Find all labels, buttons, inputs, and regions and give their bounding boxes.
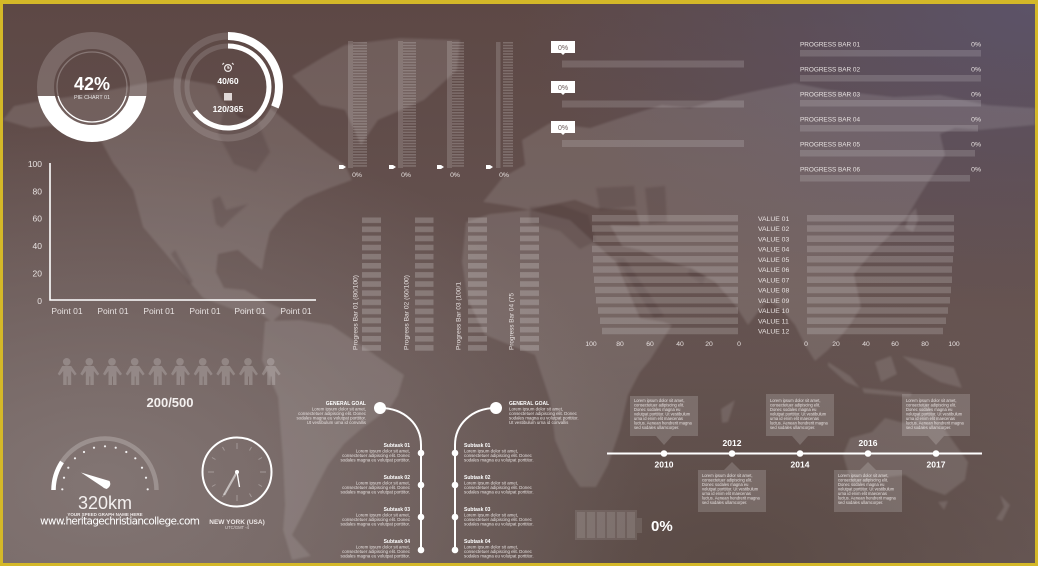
subtask 01: consectetuer adipiscing elit. Donec: [342, 453, 411, 458]
axis labels: 80: [616, 341, 624, 348]
gauge track: [54, 439, 156, 490]
gauge value arc: [54, 462, 62, 490]
timeline years: 2010: [655, 460, 674, 470]
rotated labels: Progress Bar 03 (100/1: [456, 282, 462, 350]
clock face: [202, 438, 272, 506]
subtask 03: Lorem ipsum dolor sit amet,: [356, 512, 410, 518]
subtask 02: [340, 475, 411, 494]
callout 2010: Lorem ipsum dolor sit amet,: [634, 398, 685, 403]
timeline line: [607, 452, 982, 454]
subtask 04: consectetuer adipiscing elit. Donec: [464, 549, 533, 554]
map: north america: [3, 78, 352, 322]
callout 2016: luctus. Aenean hendrerit magna: [838, 496, 897, 500]
y axis labels: 20: [33, 268, 42, 278]
path nodes: [374, 402, 424, 553]
rotated labels: Progress Bar 02 (60/100): [404, 275, 410, 350]
labelled progress bars: [800, 42, 981, 182]
ring value one: 40/60: [217, 76, 239, 86]
value labels: VALUE 02: [758, 226, 789, 233]
callout 2010: luctus. Aenean hendrerit magna: [634, 420, 693, 426]
bar names: PROGRESS BAR 01: [800, 42, 860, 48]
subtask 02: Subtask 02: [384, 475, 410, 481]
bar values: [352, 172, 509, 179]
value labels: VALUE 07: [758, 278, 789, 284]
gauge dots: [61, 445, 149, 490]
pie chart value arc: [38, 96, 146, 142]
bar names: PROGRESS BAR 05: [800, 142, 860, 148]
callout 2016: [834, 462, 902, 512]
bar names: [800, 42, 860, 174]
callout 2012: luctus. Aenean hendrerit magna: [702, 496, 761, 500]
subtask 01: consectetuer adipiscing elit. Donec: [464, 453, 533, 458]
callout 2014: urna id enim elit maecenas: [770, 416, 819, 421]
bar values: 0%: [971, 66, 981, 74]
map: indonesia and islands: [828, 356, 962, 397]
axis labels: 100: [585, 341, 597, 348]
subtask 03: consectetuer adipiscing elit. Donec: [342, 517, 411, 522]
subtask 01: Lorem ipsum dolor sit amet,: [356, 448, 410, 454]
callout 2010: [630, 396, 698, 445]
callout 2017: volutpat porttitor. Ut vestibulum: [906, 412, 963, 416]
timeline years: [655, 438, 946, 470]
callout 2017: sed sodales ullamcorper.: [906, 425, 951, 430]
icon: alarm clock: [222, 63, 234, 71]
callout 2017: Donec sodales magna eu: [906, 407, 952, 412]
y axis labels: [28, 159, 42, 306]
subtask 01: Subtask 01: [464, 443, 491, 449]
ring tracks: [177, 36, 279, 138]
callout 2010: consectetuer adipiscing elit.: [634, 402, 684, 408]
x axis labels: Point 01: [51, 306, 83, 316]
callout 2012: consectetuer adipiscing elit.: [702, 478, 752, 482]
callout 2014: [766, 394, 834, 445]
axis labels: 40: [862, 341, 870, 348]
goal text: [509, 401, 579, 425]
subtask 02: sodales magna eu volutpat porttitor.: [340, 490, 410, 494]
rotated labels: [352, 275, 516, 350]
subtask 04: consectetuer adipiscing elit. Donec: [342, 549, 411, 554]
y axis labels: 40: [33, 241, 42, 251]
map: small islands: [721, 208, 1010, 521]
callout 2016: Lorem ipsum dolor sit amet,: [838, 473, 889, 478]
line chart axes: [28, 159, 316, 316]
timeline years: 2016: [859, 438, 878, 448]
bar values: [971, 42, 981, 174]
goal text: GENERAL GOAL: [509, 401, 549, 407]
callout 2016: sed sodales ullamcorper.: [838, 500, 883, 505]
subtask 03: [340, 507, 411, 526]
y axis labels: 100: [28, 159, 42, 169]
segmented vertical bars: [352, 217, 539, 351]
left goal path: [296, 401, 424, 558]
callout 2017: Lorem ipsum dolor sit amet,: [906, 398, 957, 403]
callout 2016: consectetuer adipiscing elit.: [838, 478, 888, 482]
axis labels: 60: [646, 341, 654, 348]
icon: calendar: [224, 93, 232, 100]
x axis labels: Point 01: [143, 306, 175, 316]
bar values: 0%: [971, 166, 981, 174]
path line: [380, 408, 421, 550]
subtask 01: Lorem ipsum dolor sit amet,: [464, 448, 518, 454]
clock city: NEW YORK (USA): [209, 519, 265, 526]
rotated labels: Progress Bar 04 (75: [508, 293, 516, 350]
goal text: GENERAL GOAL: [326, 401, 366, 407]
callout 2010: urna id enim elit maecenas: [634, 416, 683, 421]
bar markers: [339, 165, 493, 169]
subtask 04: sodales magna eu volutpat porttitor.: [340, 554, 410, 558]
subtask 04: [464, 539, 534, 558]
y axis labels: 60: [33, 214, 42, 224]
subtask 03: Subtask 03: [384, 507, 410, 513]
callout 2017: urna id enim elit maecenas: [906, 416, 955, 421]
map: greenland: [292, 38, 460, 145]
value labels: VALUE 06: [758, 267, 789, 274]
callout 2014: sed sodales ullamcorper.: [770, 425, 815, 430]
battery cells: [577, 512, 635, 538]
x axis labels: Point 01: [189, 306, 221, 316]
y axis labels: 80: [33, 186, 42, 196]
battery value: 0%: [651, 518, 673, 535]
tooltip values: [558, 45, 568, 132]
bars: [800, 50, 981, 182]
axis labels: 100: [948, 341, 960, 348]
subtask 04: sodales magna eu volutpat porttitor.: [464, 554, 534, 558]
callout 2012: urna id enim elit maecenas: [702, 491, 751, 496]
value labels: VALUE 03: [758, 236, 789, 244]
goal text: [296, 401, 367, 425]
timeline years: 2012: [723, 438, 742, 448]
pie chart 01: [46, 40, 138, 134]
path line: [455, 408, 496, 550]
goal text: Lorem ipsum dolor sit amet,: [509, 406, 563, 412]
battery: [575, 510, 673, 540]
subtask 01: sodales magna eu volutpat porttitor.: [340, 458, 410, 462]
clock timezone: UTC/GMT -4: [225, 525, 250, 530]
axis labels: 20: [705, 341, 713, 348]
callout 2017: luctus. Aenean hendrerit magna: [906, 420, 965, 426]
segments: [362, 217, 539, 351]
subtask 03: Subtask 03: [464, 507, 491, 513]
ring value arcs: [195, 36, 279, 128]
bar values: 0%: [450, 172, 460, 179]
callout 2014: Donec sodales magna eu: [770, 407, 816, 412]
subtask 04: [340, 539, 411, 558]
callout 2016: Donec sodales magna eu: [838, 482, 884, 487]
subtask 02: Lorem ipsum dolor sit amet,: [356, 480, 410, 486]
map: inland seas: [171, 110, 706, 318]
bar tracks: [348, 41, 500, 168]
timeline years: 2017: [927, 460, 946, 470]
value labels: VALUE 10: [758, 308, 789, 315]
subtask 01: [464, 443, 534, 462]
y axis labels: 0: [37, 296, 42, 306]
tooltip boxes: [551, 41, 575, 135]
callout 2012: volutpat porttitor. Ut vestibulum: [702, 486, 759, 492]
subtask 02: sodales magna eu volutpat porttitor.: [464, 490, 534, 494]
map: africa: [462, 210, 672, 487]
double ring chart: [177, 36, 279, 138]
callout 2012: [698, 462, 766, 512]
goal text: Ut vestibulum urna id convallis: [509, 420, 569, 425]
value labels: VALUE 05: [758, 257, 789, 264]
bar values: 0%: [352, 172, 362, 179]
x axis labels: Point 01: [280, 306, 312, 316]
axis labels: 0: [804, 341, 808, 348]
callout 2017: [902, 394, 970, 445]
right bars: [807, 215, 954, 334]
vertical striped bars: [339, 41, 513, 179]
bar values: 0%: [971, 92, 981, 98]
left bars: [592, 215, 738, 334]
callout 2012: sed sodales ullamcorper.: [702, 500, 747, 505]
goal text: Lorem ipsum dolor sit amet,: [312, 406, 366, 412]
map: eurasia: [483, 83, 1035, 361]
subtask 02: Lorem ipsum dolor sit amet,: [464, 480, 518, 486]
bar stripes: [353, 41, 513, 168]
bar values: 0%: [971, 42, 981, 48]
value labels: VALUE 11: [758, 318, 789, 326]
bar values: 0%: [499, 172, 509, 179]
subtask 02: consectetuer adipiscing elit. Donec: [342, 485, 411, 490]
callout 2010: Donec sodales magna eu: [634, 407, 680, 412]
tooltip values: 0%: [558, 125, 568, 132]
speed gauge: [54, 439, 156, 517]
bar values: 0%: [401, 172, 411, 179]
axis labels: 80: [921, 341, 929, 348]
pie chart label: PIE CHART 01: [74, 95, 110, 101]
map: south america: [262, 320, 404, 560]
callout 2014: Lorem ipsum dolor sit amet,: [770, 398, 821, 403]
people count: 200/500: [146, 395, 194, 410]
subtask 04: Subtask 04: [464, 539, 491, 545]
callout 2016: urna id enim elit maecenas: [838, 491, 887, 496]
callout 2012: Lorem ipsum dolor sit amet,: [702, 473, 753, 478]
axis labels: 40: [676, 341, 684, 348]
value labels: VALUE 04: [758, 247, 789, 254]
subtask 03: sodales magna eu volutpat porttitor.: [340, 522, 410, 526]
timeline: [607, 394, 982, 512]
ring value two: 120/365: [213, 104, 244, 114]
value labels: [758, 216, 789, 336]
bar values: 0%: [971, 116, 981, 124]
pie chart value: 42%: [74, 74, 110, 94]
goal text: consectetuer adipiscing elit. Donec: [509, 411, 578, 416]
bars: [562, 60, 744, 147]
bar names: PROGRESS BAR 03: [800, 92, 860, 98]
timeline nodes: [661, 450, 939, 457]
value labels: VALUE 01: [758, 216, 789, 223]
goal text: sodales magna eu volutpat porttitor.: [296, 416, 366, 420]
x axis labels: Point 01: [234, 306, 266, 316]
clock ticks: [208, 443, 266, 501]
gauge needle: [81, 472, 110, 489]
bar values: 0%: [971, 142, 981, 148]
x axis labels: [51, 306, 312, 316]
callout 2010: sed sodales ullamcorper.: [634, 425, 679, 430]
goal text: Ut vestibulum urna id convallis: [307, 420, 367, 425]
path nodes: [452, 402, 502, 553]
subtask 03: consectetuer adipiscing elit. Donec: [464, 517, 533, 522]
axis labels: 60: [891, 341, 899, 348]
bar names: PROGRESS BAR 04: [800, 116, 860, 124]
battery body: [575, 510, 642, 540]
value labels: VALUE 08: [758, 288, 789, 295]
axis labels: [585, 341, 960, 348]
clock: [202, 438, 272, 530]
tooltip values: 0%: [558, 85, 568, 92]
bar names: PROGRESS BAR 06: [800, 166, 860, 174]
callout 2012: Donec sodales magna eu: [702, 482, 748, 487]
gauge value: 320km: [78, 493, 132, 513]
callout 2017: consectetuer adipiscing elit.: [906, 402, 956, 408]
callout 2014: luctus. Aenean hendrerit magna: [770, 420, 829, 426]
subtask 02: Subtask 02: [464, 475, 491, 481]
subtask 03: sodales magna eu volutpat porttitor.: [464, 522, 534, 526]
axis labels: 0: [737, 341, 741, 348]
butterfly bar chart: [585, 215, 960, 348]
x axis labels: Point 01: [97, 306, 129, 316]
subtask 03: Lorem ipsum dolor sit amet,: [464, 512, 518, 518]
tooltip progress bars: [551, 41, 744, 147]
goal text: consectetuer adipiscing elit. Donec: [298, 411, 367, 416]
callout 2014: consectetuer adipiscing elit.: [770, 402, 820, 408]
watermark: www.heritagechristiancollege.com: [40, 516, 200, 528]
subtask 04: Lorem ipsum dolor sit amet,: [464, 544, 518, 550]
right goal path: [452, 401, 579, 558]
pie chart background ring: [37, 32, 147, 96]
map: australia: [843, 400, 968, 495]
rotated labels: Progress Bar 01 (80/100): [352, 275, 360, 350]
value labels: VALUE 12: [758, 329, 789, 336]
callout 2014: volutpat porttitor. Ut vestibulum: [770, 412, 827, 416]
callout 2010: volutpat porttitor. Ut vestibulum: [634, 412, 691, 416]
subtask 01: Subtask 01: [384, 443, 410, 449]
subtask 02: [464, 475, 534, 494]
gauge label: YOUR SPEED GRAPH NAME HERE: [67, 512, 143, 517]
subtask 02: consectetuer adipiscing elit. Donec: [464, 485, 533, 490]
subtask 03: [464, 507, 534, 526]
subtask 01: [340, 443, 411, 462]
clock hands: [224, 472, 237, 495]
tooltip values: 0%: [558, 45, 568, 52]
people pictogram: [58, 358, 281, 385]
callout 2016: volutpat porttitor. Ut vestibulum: [838, 486, 895, 492]
goal text: sodales magna eu volutpat porttitor.: [509, 416, 579, 420]
bar names: PROGRESS BAR 02: [800, 66, 860, 74]
timeline years: 2014: [791, 460, 810, 470]
axis labels: 20: [832, 341, 840, 348]
subtask 04: Subtask 04: [384, 539, 410, 545]
subtask 04: Lorem ipsum dolor sit amet,: [356, 544, 410, 550]
subtask 01: sodales magna eu volutpat porttitor.: [464, 458, 534, 462]
axes: [50, 163, 316, 300]
value labels: VALUE 09: [758, 298, 789, 305]
